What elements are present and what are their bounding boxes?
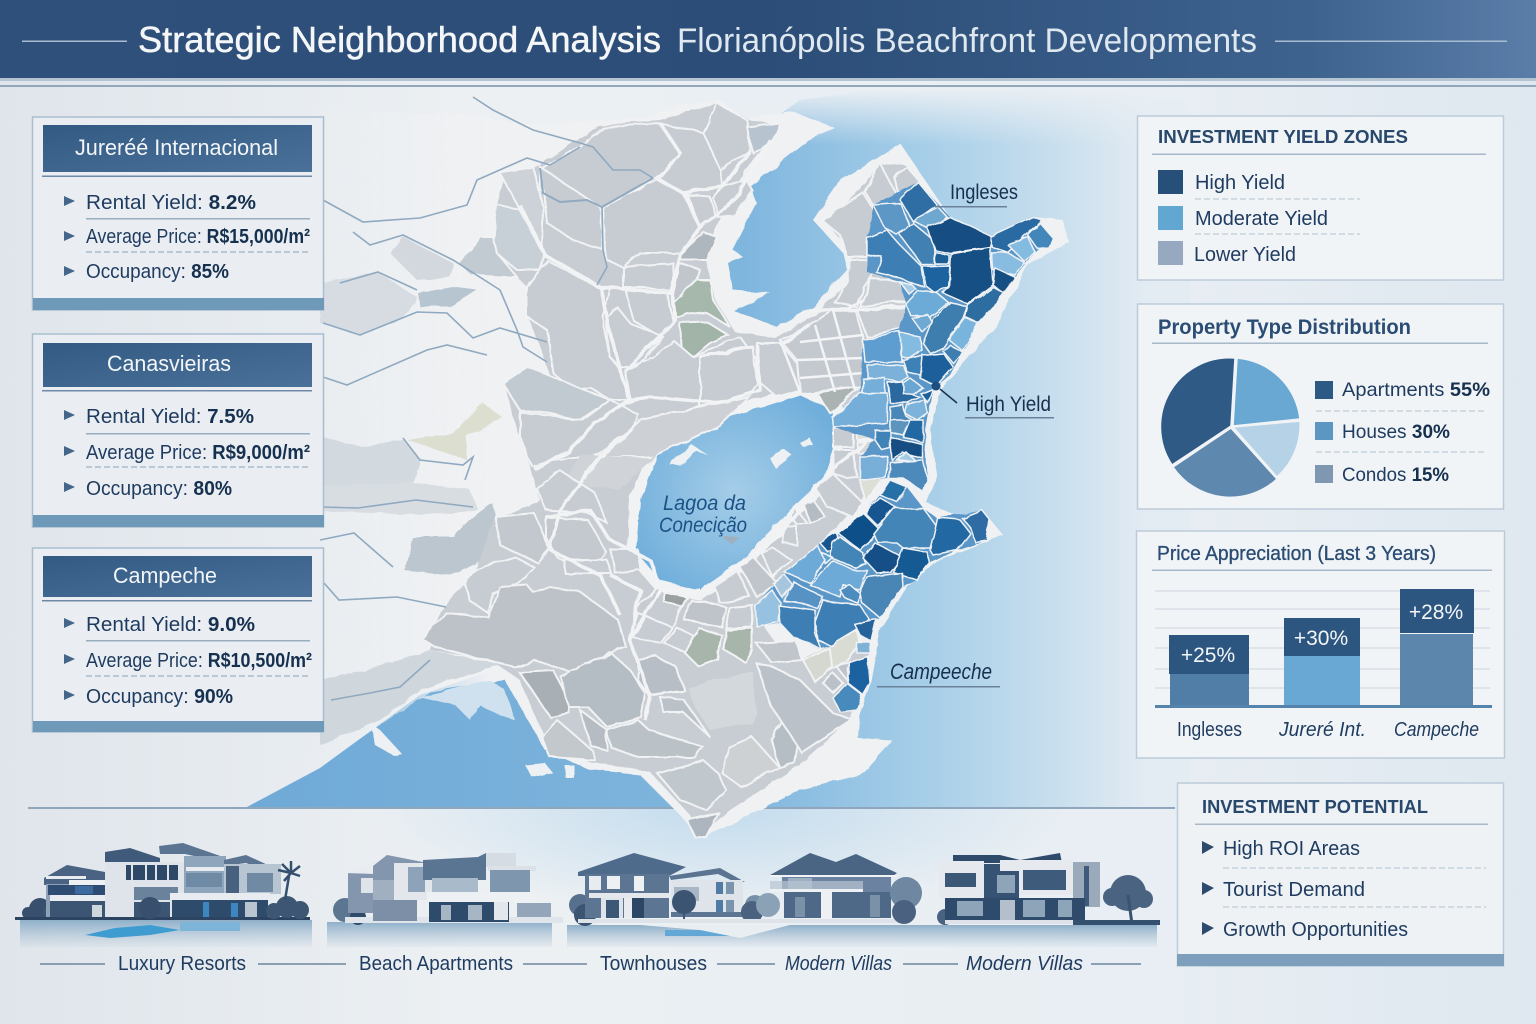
panel heading: Jureréé Internacional (75, 135, 278, 160)
potential list (1202, 838, 1486, 941)
legend: lower yield: Lower Yield (1194, 244, 1296, 266)
grey districts (320, 103, 920, 837)
pie legend (1315, 379, 1490, 486)
high-yield coastal blue districts (755, 182, 1052, 712)
captions for property types: Modern Villas (966, 953, 1083, 975)
pie legend: Houses 30% (1342, 421, 1450, 443)
panel heading: Campeche (113, 563, 217, 588)
Lagoa shoreline (636, 395, 835, 590)
panel heading: Canasvieiras (107, 351, 231, 376)
panel: Canasvieiras (32, 334, 324, 527)
grey interior base (430, 103, 950, 835)
header band (0, 0, 1536, 87)
label: Ingleses (935, 181, 1018, 208)
label: Lagoa da Conecição (659, 492, 747, 537)
panel heading (43, 125, 312, 172)
panel stats: Average Price: R$10,500/m² (86, 650, 312, 672)
panel stats: Rental Yield: 7.5% (86, 406, 254, 428)
pie legend: Condos 15% (1342, 464, 1449, 486)
captions for property types (40, 953, 1141, 975)
panel stats: Average Price: R$9,000/m² (86, 442, 310, 464)
legend heading: INVESTMENT YIELD ZONES (1158, 127, 1408, 147)
label: Campeeche: Campeeche (890, 659, 992, 684)
potential list: Tourist Demand (1223, 879, 1365, 901)
panel: Campeche (32, 548, 324, 732)
bar: Campeche: +28% (1409, 601, 1463, 624)
separator line (28, 807, 1175, 809)
captions for property types: Luxury Resorts (118, 953, 246, 975)
label: High Yield with pointer (932, 382, 1054, 418)
title: Strategic Neighborhood Analysis (138, 19, 661, 60)
title: Florianópolis Beachfront Developments (677, 22, 1257, 60)
panel: property type distribution (1138, 304, 1504, 509)
illustration: modern villa one (756, 853, 953, 925)
panel stats: Occupancy: 90% (86, 686, 233, 708)
panel heading (43, 556, 312, 597)
label: High Yield with pointer: High Yield (966, 393, 1051, 416)
panel stats: Occupancy: 80% (86, 478, 232, 500)
panel stats: Rental Yield: 8.2% (86, 192, 256, 214)
panel stats: Rental Yield: 9.0% (86, 614, 255, 636)
panel: Jureré Internacional (32, 117, 324, 310)
panel: investment yield zones (1138, 116, 1504, 280)
main roads (520, 123, 910, 720)
panel stats (64, 406, 310, 500)
city street grid (780, 300, 864, 392)
panel stats: Average Price: R$15,000/m² (86, 226, 310, 248)
illustration: townhouses (569, 853, 778, 926)
bar chart (1155, 589, 1492, 741)
lagoon islands (670, 438, 813, 545)
legend: high yield (1158, 170, 1285, 194)
legend: moderate yield: Moderate Yield (1195, 208, 1328, 230)
illustration: beach apartments (333, 853, 563, 925)
Lagoa da Conceicao water (636, 395, 835, 590)
bar chart: Ingleses (1177, 719, 1242, 741)
bar: Ingleses: +25% (1181, 644, 1235, 667)
panel stats: Occupancy: 85% (86, 261, 229, 283)
map of Florianópolis (245, 97, 1070, 838)
potential list: Growth Opportunities (1223, 919, 1408, 941)
panel: price appreciation (1136, 531, 1504, 758)
panel: investment potential (1177, 783, 1504, 966)
panel stats (64, 192, 310, 283)
legend: lower yield (1158, 241, 1296, 266)
rivers on the mainland (320, 97, 653, 700)
land silhouette (245, 100, 1070, 838)
label: Ingleses: Ingleses (950, 181, 1018, 204)
bar chart: Campeche (1394, 719, 1479, 741)
bar chart: Jureré Int. (1278, 719, 1366, 741)
panel stats (64, 614, 312, 708)
bar: Campeche (1400, 589, 1474, 705)
halo below map (370, 809, 1070, 1009)
pie legend: Apartments 55% (1342, 379, 1490, 401)
captions for property types: Townhouses (600, 953, 707, 975)
illustration: luxury resort (15, 843, 310, 920)
illustration: modern villa two (939, 853, 1160, 925)
panel heading (43, 343, 312, 387)
bar: Jureré Int. (1284, 618, 1360, 705)
pie chart (1160, 358, 1300, 497)
panel heading: INVESTMENT POTENTIAL (1202, 797, 1428, 817)
captions for property types: Modern Villas (785, 953, 892, 975)
label: Lagoa da Conecição: Lagoa da (663, 492, 746, 515)
chart heading: Property Type Distribution (1158, 316, 1411, 339)
potential list: High ROI Areas (1223, 838, 1360, 860)
title (138, 19, 1257, 60)
southern islets (370, 680, 574, 778)
label: Lagoa da Conecição: Conecição (659, 514, 747, 537)
legend: high yield: High Yield (1195, 172, 1285, 194)
captions for property types: Beach Apartments (359, 953, 513, 975)
bar: Ingleses (1169, 635, 1249, 705)
sea (245, 90, 1200, 808)
chart heading: Price Appreciation (Last 3 Years) (1157, 543, 1436, 565)
water reflections under buildings (20, 920, 1157, 947)
bar: Jureré Int.: +30% (1294, 627, 1348, 650)
